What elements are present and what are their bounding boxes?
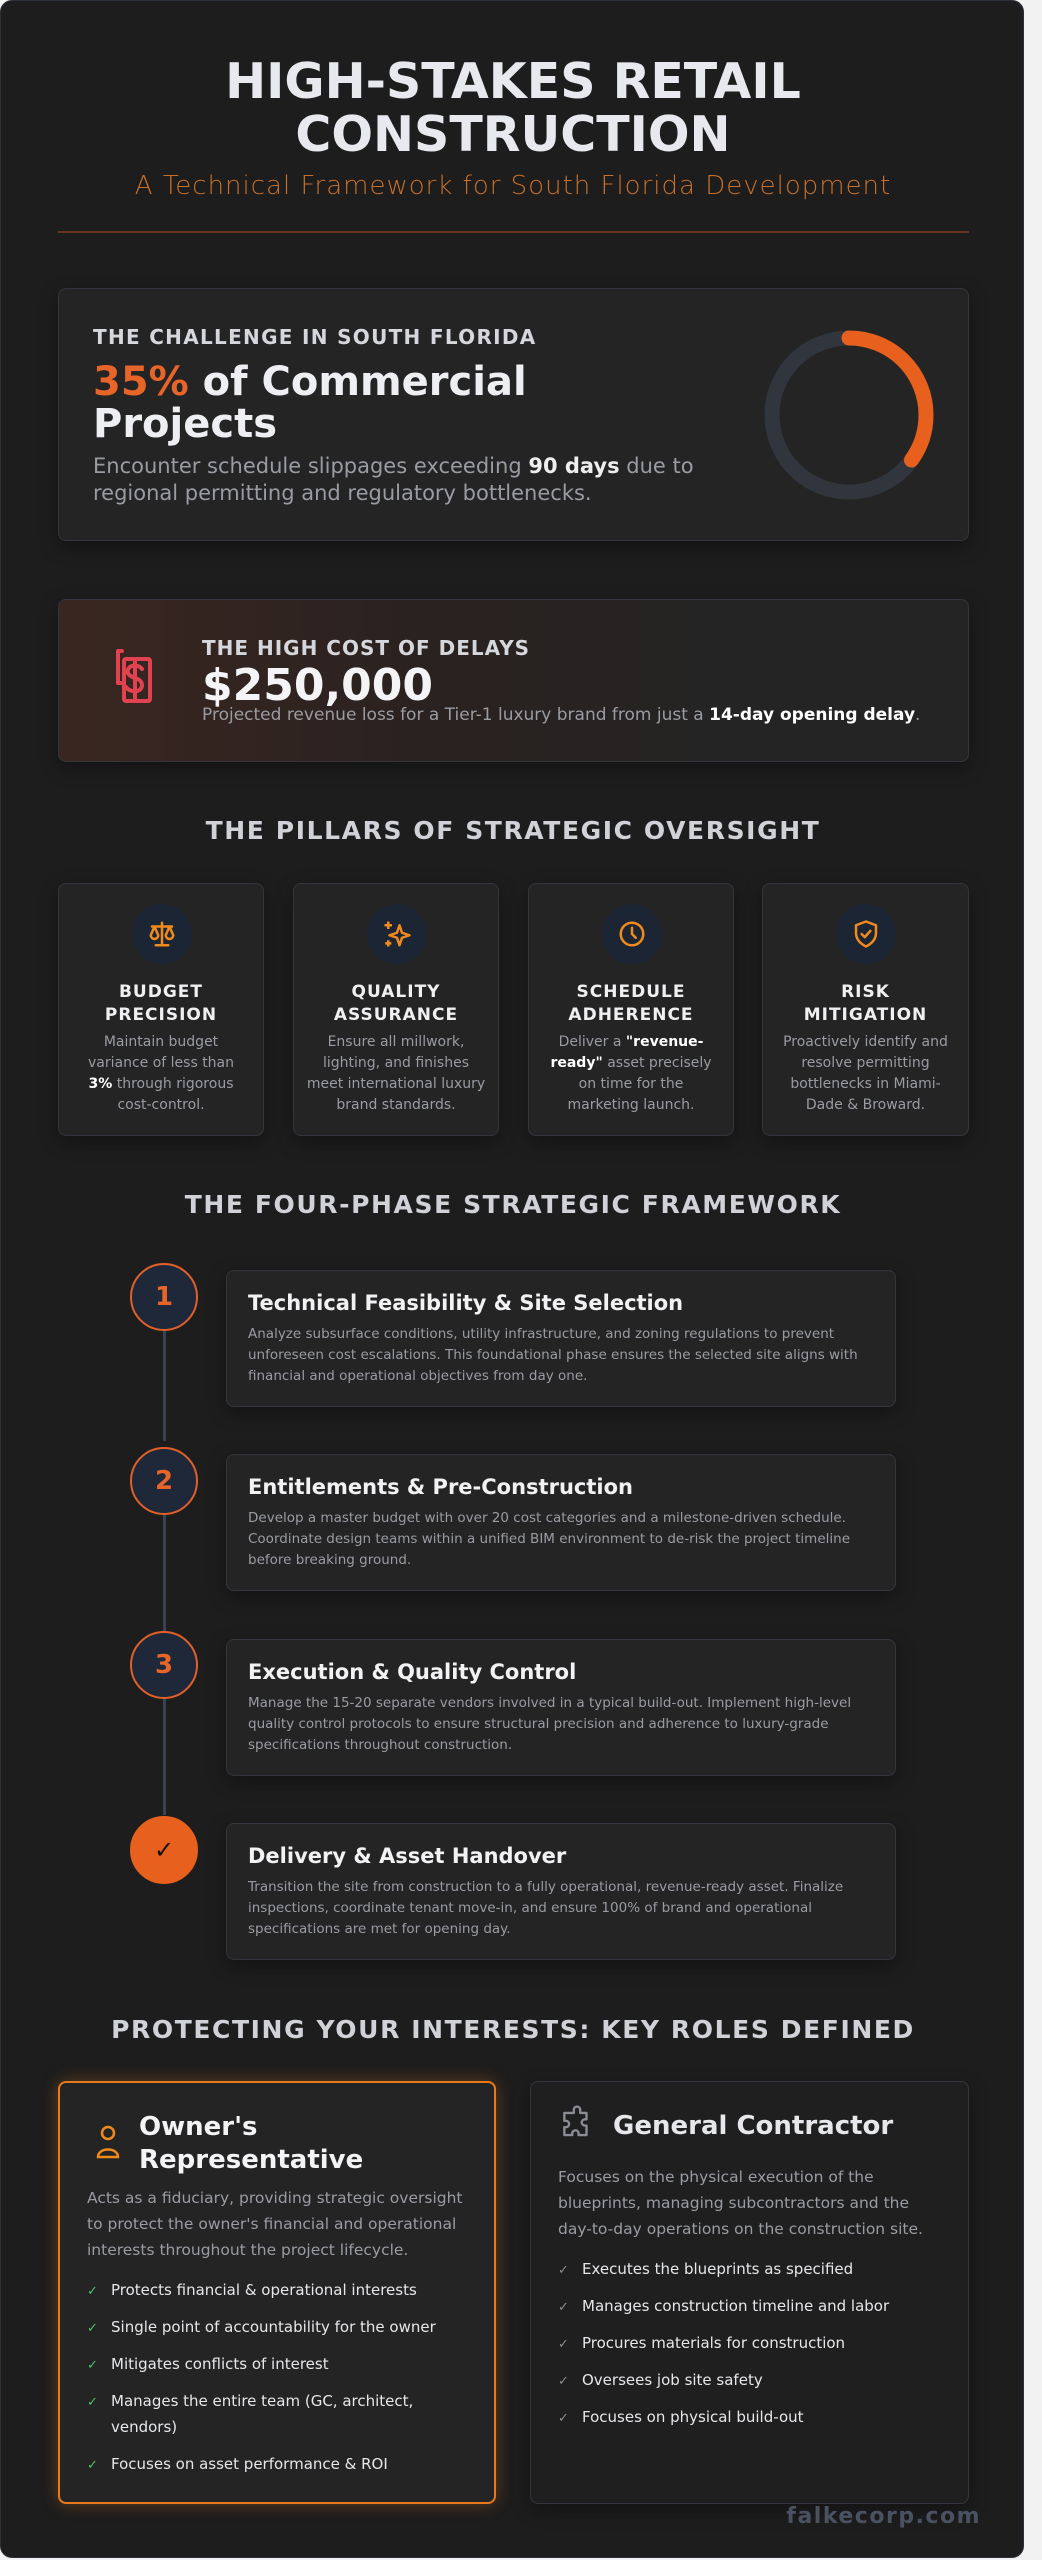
phase 4 card: Delivery & Asset Handover xyxy=(248,1844,566,1868)
risk title xyxy=(804,982,927,1025)
quality title: ASSURANCE xyxy=(334,1005,458,1025)
owner bullet list: Protects financial & operational interests xyxy=(111,2281,417,2299)
cost figure: $250,000 xyxy=(202,660,433,711)
gc bullet list: Manages construction timeline and labor xyxy=(582,2297,889,2315)
owner title: Owner's xyxy=(139,2112,258,2142)
step 4 marker: check xyxy=(130,1816,198,1884)
gc bullet list: Oversees job site safety xyxy=(582,2371,763,2389)
owner bullet list: Single point of accountability for the owner xyxy=(111,2318,436,2336)
challenge stat xyxy=(93,359,527,447)
title: HIGH-STAKES RETAIL xyxy=(225,53,801,110)
heading: roles: PROTECTING YOUR INTERESTS: KEY ROLES DEFINED xyxy=(111,2015,915,2044)
phase 3 card: Execution & Quality Control xyxy=(248,1660,576,1684)
icon: puzzle xyxy=(563,2105,588,2136)
cost description: Projected revenue loss for a Tier-1 luxury brand from just a 14-day opening delay. xyxy=(202,705,920,725)
owner bullet list: Focuses on asset performance & ROI xyxy=(111,2455,388,2473)
owner description: Acts as a fiduciary, providing strategic oversight to protect the owner's financial and operational interests throughout the project lifecycle. xyxy=(87,2189,462,2259)
panel: quality assurance xyxy=(293,883,499,1136)
gc description: Focuses on the physical execution of the blueprints, managing subcontractors and the day-to-day operations on the construction site. xyxy=(558,2168,923,2238)
phase 1 card xyxy=(226,1270,896,1407)
icon: scales xyxy=(132,904,192,964)
step 1 marker: 1 xyxy=(155,1282,173,1312)
phase 1 card: Analyze subsurface conditions, utility infrastructure, and zoning regulations to prevent unforeseen cost escalations. This foundational phase ensures the selected site aligns with financial and operational objectives from day one. xyxy=(248,1326,858,1384)
step 4 marker: check: ✓ xyxy=(154,1836,174,1864)
challenge stat: Projects xyxy=(93,401,277,447)
phase 3 card: Manage the 15-20 separate vendors involved in a typical build-out. Implement high-level quality control protocols to ensure structural precision and adherence to luxury-grade specifications throughout construction. xyxy=(248,1695,851,1753)
owner bullet list: Mitigates conflicts of interest xyxy=(111,2355,329,2373)
step 2 marker: 2 xyxy=(155,1466,173,1496)
schedule title: ADHERENCE xyxy=(568,1005,694,1025)
panel: challenge xyxy=(58,288,969,541)
panel: general contractor xyxy=(530,2081,969,2504)
risk title: RISK xyxy=(841,982,890,1002)
schedule title: SCHEDULE xyxy=(577,982,685,1002)
step 3 marker xyxy=(130,1631,198,1699)
donut chart xyxy=(764,330,934,500)
heading: pillars: THE PILLARS OF STRATEGIC OVERSIGHT xyxy=(206,816,820,845)
icon: shield xyxy=(836,904,896,964)
quality text: Ensure all millwork, lighting, and finishes meet international luxury brand standards. xyxy=(307,1034,485,1113)
panel: cost of delays xyxy=(58,599,969,762)
gc bullet list: Focuses on physical build-out xyxy=(582,2408,804,2426)
owner bullet list: Manages the entire team (GC, architect, vendors) xyxy=(111,2392,413,2436)
challenge description: Encounter schedule slippages exceeding 90 days due to regional permitting and regulatory bottlenecks. xyxy=(93,454,694,505)
icon: sparkles xyxy=(367,904,427,964)
step 3 marker: 3 xyxy=(155,1650,173,1680)
budget title xyxy=(105,982,217,1025)
phase 4 card xyxy=(226,1823,896,1960)
owner title: Representative xyxy=(139,2145,363,2175)
gc bullet list: Executes the blueprints as specified xyxy=(582,2260,853,2278)
title xyxy=(225,53,801,163)
cost label: THE HIGH COST OF DELAYS xyxy=(202,636,530,660)
gc bullet list xyxy=(560,2260,890,2426)
gc title: General Contractor xyxy=(613,2111,893,2141)
quality title xyxy=(334,982,458,1025)
heading: framework: THE FOUR-PHASE STRATEGIC FRAMEWORK xyxy=(185,1190,841,1219)
subtitle: A Technical Framework for South Florida Development xyxy=(135,171,891,201)
phase 2 card xyxy=(226,1454,896,1591)
challenge label: THE CHALLENGE IN SOUTH FLORIDA xyxy=(93,325,537,349)
footer brand: falkecorp.com xyxy=(786,2504,981,2529)
quality title: QUALITY xyxy=(352,982,440,1002)
panel: owner's representative xyxy=(58,2081,496,2504)
schedule text: Deliver a "revenue-ready" asset precisely on time for the marketing launch. xyxy=(550,1034,712,1113)
icon: money xyxy=(116,649,152,703)
phase 2 card: Entitlements & Pre-Construction xyxy=(248,1475,633,1499)
owner title xyxy=(139,2112,363,2175)
phase 3 card xyxy=(226,1639,896,1776)
owner bullet list xyxy=(89,2281,436,2473)
icon: person xyxy=(96,2126,120,2158)
panel: schedule adherence xyxy=(528,883,734,1136)
icon: clock xyxy=(602,904,662,964)
budget title: PRECISION xyxy=(105,1005,217,1025)
budget title: BUDGET xyxy=(119,982,203,1002)
phase 2 card: Develop a master budget with over 20 cost categories and a milestone-driven schedule. Coordinate design teams within a unified BIM environment to de-risk the project timeline before breaking ground. xyxy=(248,1510,850,1568)
step 2 marker xyxy=(130,1447,198,1515)
gc bullet list: Procures materials for construction xyxy=(582,2334,845,2352)
phase 4 card: Transition the site from construction to a fully operational, revenue-ready asset. Finalize inspections, coordinate tenant move-in, and ensure 100% of brand and operational specifications are met for opening day. xyxy=(248,1879,843,1937)
panel: risk mitigation xyxy=(762,883,969,1136)
risk title: MITIGATION xyxy=(804,1005,927,1025)
title: CONSTRUCTION xyxy=(295,106,731,163)
challenge stat: 35% of Commercial xyxy=(93,359,527,405)
budget text: Maintain budget variance of less than 3% through rigorous cost-control. xyxy=(88,1034,234,1113)
phase 1 card: Technical Feasibility & Site Selection xyxy=(248,1291,683,1315)
panel: budget precision xyxy=(58,883,264,1136)
schedule title xyxy=(568,982,694,1025)
step 1 marker xyxy=(130,1263,198,1331)
risk text: Proactively identify and resolve permitting bottlenecks in Miami-Dade & Broward. xyxy=(783,1034,948,1113)
